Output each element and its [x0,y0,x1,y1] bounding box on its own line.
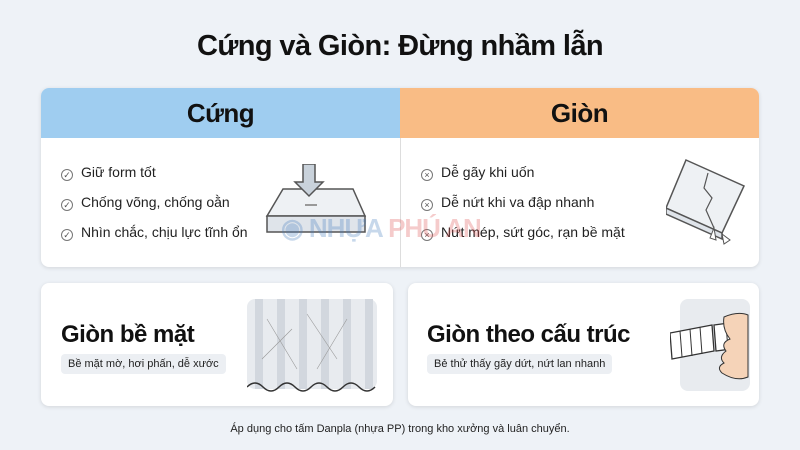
header: Cứng: Cứng [187,98,254,128]
image: scratched surface [247,299,377,392]
list: giòn: × [424,170,430,180]
header: Cứng [41,88,400,138]
list: cứng: Nhìn chắc, chịu lực tĩnh ổn [81,224,248,240]
list: cứng: Giữ form tốt [81,164,156,180]
list: giòn: Dễ nứt khi va đập nhanh [441,194,594,210]
image: broken twin-wall with hand [670,299,750,391]
card title: Giòn theo cấu trúc [427,321,630,348]
card title: Giòn bề mặt [61,321,194,348]
header: Giòn [400,88,759,138]
card: giòn theo cấu trúc [408,283,759,406]
header: Giòn: Giòn [551,98,608,128]
pill [61,354,226,374]
list: cứng: ✓ [63,200,71,210]
pill: Bẻ thử thấy gãy dứt, nứt lan nhanh [434,358,605,370]
list: cứng: ✓ [63,230,71,240]
list: giòn [421,164,625,241]
list: cứng: Chống võng, chống oằn [81,194,230,210]
panel: comparison [41,88,759,267]
list: cứng [61,164,248,241]
list: giòn: × [424,200,430,210]
divider [400,138,401,267]
icon: cracked board [666,159,745,245]
card: giòn bề mặt [41,283,393,406]
list: cứng: ✓ [63,170,71,180]
list: giòn: × [424,230,430,240]
footer note: Áp dụng cho tấm Danpla (nhựa PP) trong kho xưởng và luân chuyển. [230,423,570,435]
list: giòn: Nứt mép, sứt góc, rạn bề mặt [441,224,625,240]
pill: Bề mặt mờ, hơi phấn, dễ xước [68,358,219,370]
icon: pressed board [266,164,366,233]
title: Cứng và Giòn: Đừng nhầm lẫn [197,30,603,62]
pill [427,354,612,374]
watermark: ◉ NHỰA PHÚ AN [281,213,481,243]
list: giòn: Dễ gãy khi uốn [441,164,534,180]
